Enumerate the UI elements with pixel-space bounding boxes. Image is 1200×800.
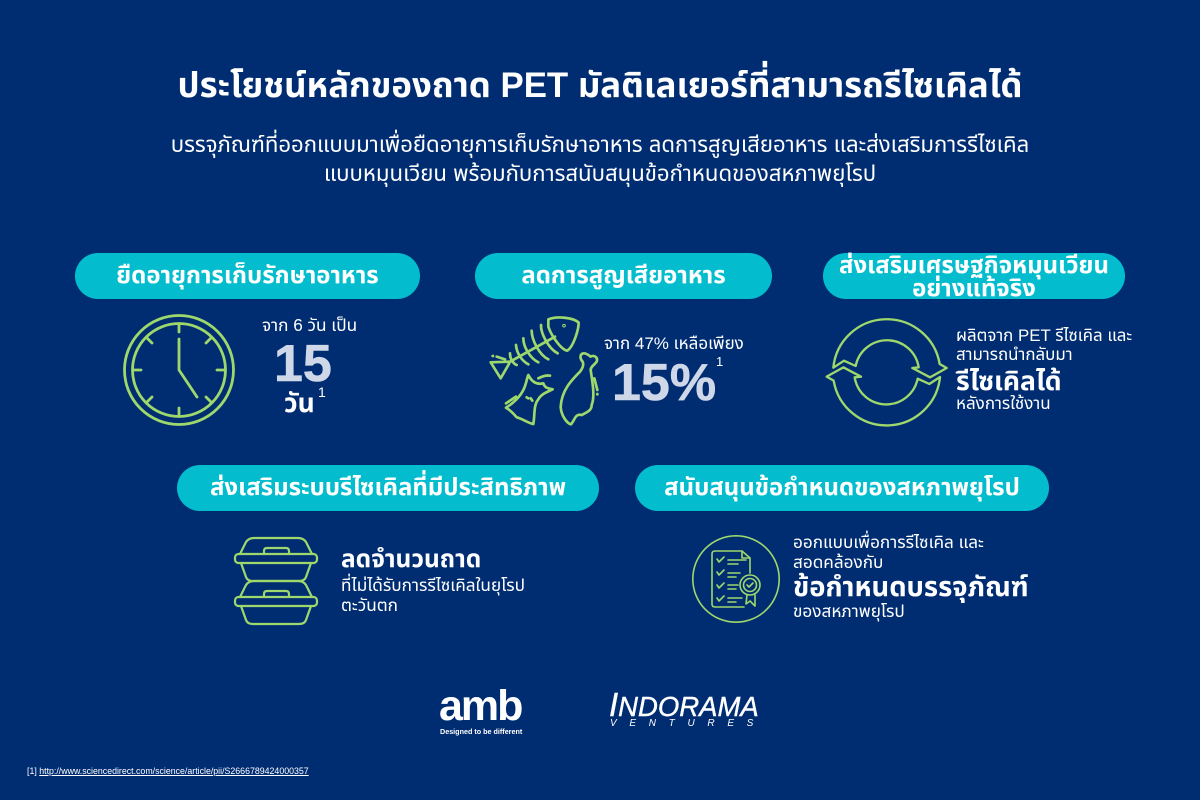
icon: clock bbox=[123, 314, 235, 426]
panel: recycling systems bbox=[177, 465, 599, 626]
heading: eu requirements: สนับสนุนข้อกำหนดของสหภาพยุโรป bbox=[664, 474, 1020, 501]
logo: indorama ventures bbox=[609, 686, 766, 729]
text: designed for recycling: สอดคล้องกับ bbox=[793, 552, 883, 572]
panel: shelf life bbox=[75, 253, 420, 426]
text: not recycled in western europe: ที่ไม่ได้รับการรีไซเคิลในยุโรป bbox=[341, 575, 525, 595]
heading: food waste bbox=[475, 253, 772, 299]
heading: eu requirements bbox=[635, 465, 1049, 511]
heading: circular economy: อย่างแท้จริง bbox=[912, 275, 1036, 302]
text: designed for recycling bbox=[793, 530, 984, 572]
text: not recycled in western europe: ตะวันตก bbox=[341, 595, 398, 615]
text: not recycled in western europe bbox=[341, 574, 525, 615]
subtitle: แบบหมุนเวียน พร้อมกับการสนับสนุนข้อกำหนดของสหภาพยุโรป bbox=[324, 161, 876, 186]
logo wordmark: amb bbox=[439, 682, 521, 730]
footnote marker: 1 bbox=[716, 354, 723, 369]
text: of the european union: ของสหภาพยุโรป bbox=[793, 601, 905, 621]
number: 15: 15 bbox=[274, 335, 332, 393]
panel: food waste bbox=[475, 253, 772, 426]
text: made from recycled PET: ผลิตจาก PET รีไซเคิล และ bbox=[956, 326, 1132, 345]
heading: shelf life: ยืดอายุการเก็บรักษาอาหาร bbox=[116, 262, 379, 289]
panel: eu requirements bbox=[635, 465, 1049, 623]
logo tagline: Designed to be different bbox=[440, 727, 522, 736]
footnote marker: 1 bbox=[318, 384, 326, 400]
text: from 6 days to: จาก 6 วัน เป็น bbox=[262, 315, 357, 335]
icon: stacked trays bbox=[234, 536, 318, 626]
text: reduce trays: ลดจำนวนถาด bbox=[341, 546, 481, 573]
icon: certified checklist bbox=[692, 535, 780, 623]
heading: food waste: ลดการสูญเสียอาหาร bbox=[521, 262, 726, 289]
icon: food scraps bbox=[489, 316, 599, 426]
heading: shelf life bbox=[75, 253, 420, 299]
footnote: [1] http://www.sciencedirect.com/science/article/pii/S2666789424000357 bbox=[27, 766, 309, 776]
logo: amb bbox=[439, 682, 522, 736]
text: packaging requirements: ข้อกำหนดบรรจุภัณฑ์ bbox=[793, 571, 1029, 602]
number: 15%: 15% bbox=[612, 354, 716, 412]
text: designed for recycling: ออกแบบเพื่อการรีไซเคิล และ bbox=[793, 532, 984, 552]
heading: circular economy bbox=[823, 253, 1125, 299]
text: days: วัน bbox=[284, 388, 315, 418]
text: from 47% to only: จาก 47% เหลือเพียง bbox=[604, 334, 744, 353]
heading: recycling systems: ส่งเสริมระบบรีไซเคิลที่มีประสิทธิภาพ bbox=[210, 474, 566, 501]
panel: circular economy bbox=[823, 252, 1132, 427]
text: after use: หลังการใช้งาน bbox=[956, 394, 1051, 413]
heading: circular economy: ส่งเสริมเศรษฐกิจหมุนเวียน bbox=[839, 252, 1109, 279]
text: recyclable: รีไซเคิลได้ bbox=[956, 366, 1062, 396]
text: made from recycled PET bbox=[956, 326, 1132, 364]
icon: circular arrows bbox=[825, 318, 948, 427]
logo wordmark: INDORAMA bbox=[609, 686, 759, 723]
title: ประโยชน์หลักของถาด PET มัลติเลเยอร์ที่สามารถรีไซเคิลได้ bbox=[178, 66, 1022, 105]
logo subtitle: VENTURES bbox=[610, 718, 766, 729]
subtitle bbox=[171, 130, 1029, 187]
heading: recycling systems bbox=[177, 465, 599, 511]
subtitle: บรรจุภัณฑ์ที่ออกแบบมาเพื่อยืดอายุการเก็บรักษาอาหาร ลดการสูญเสียอาหาร และส่งเสริมการรีไซเคิล bbox=[171, 132, 1029, 157]
text: made from recycled PET: สามารถนำกลับมา bbox=[956, 345, 1073, 364]
